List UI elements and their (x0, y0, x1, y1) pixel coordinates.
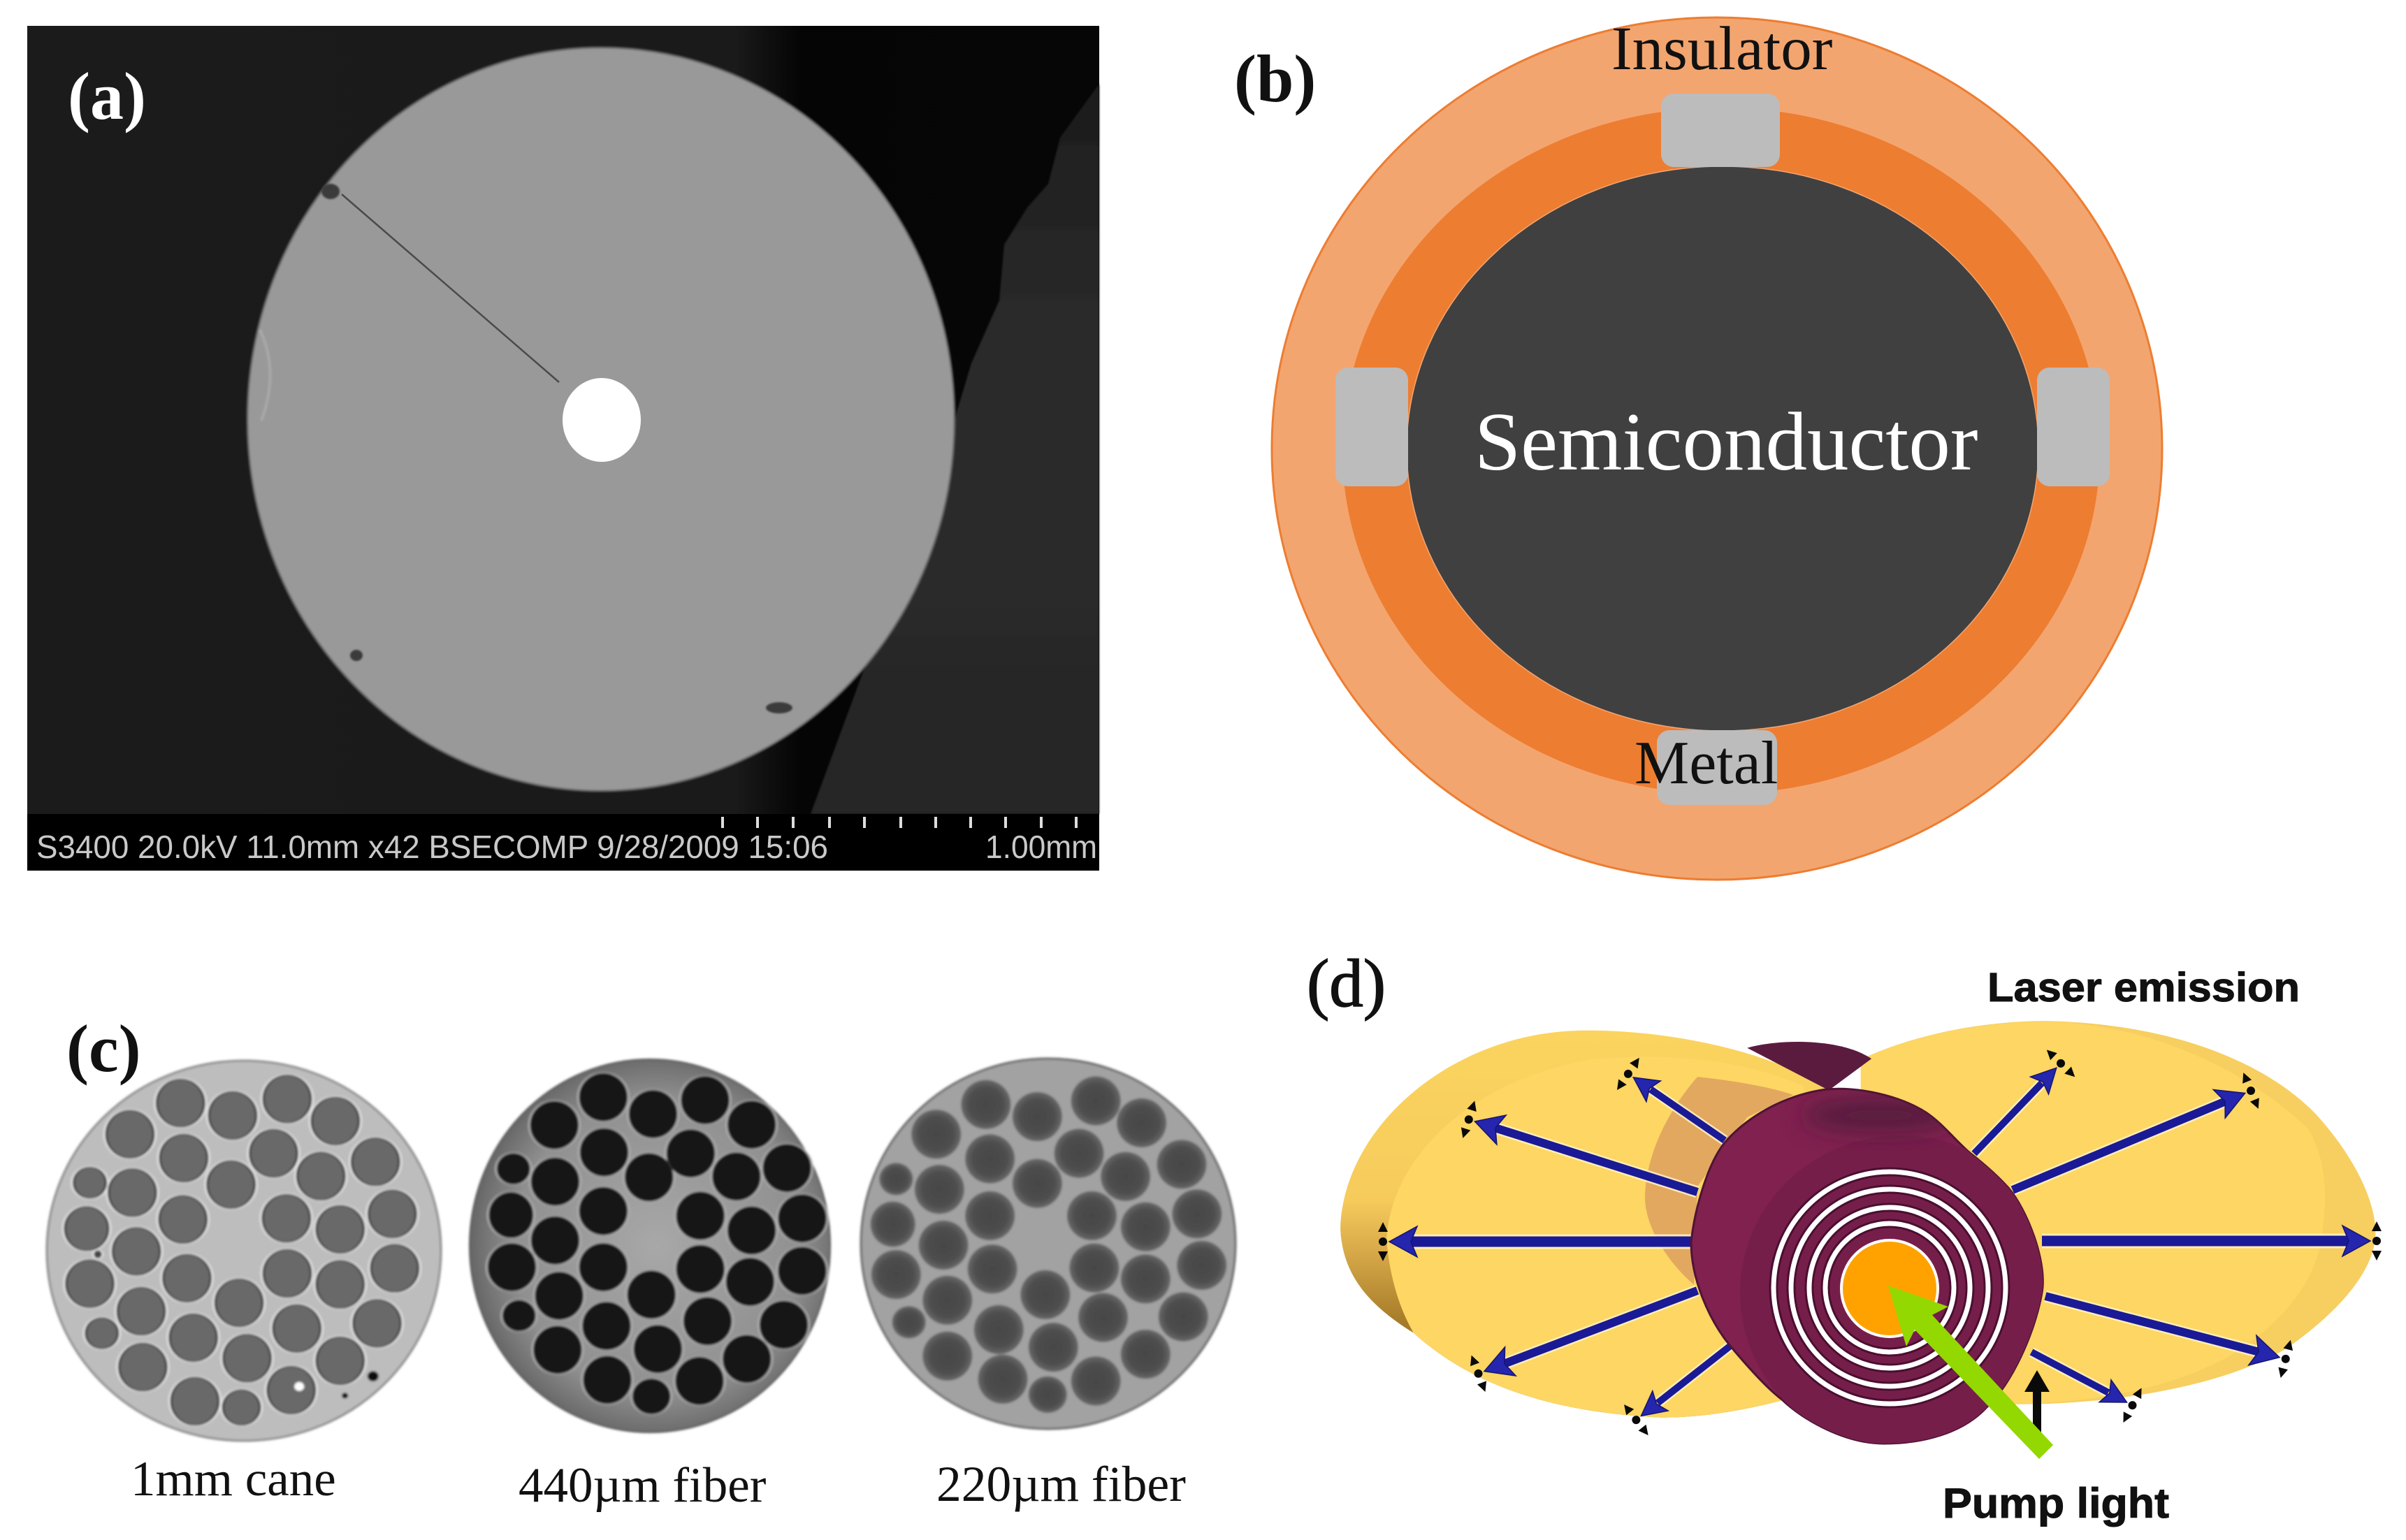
left emission lobe (1340, 1031, 1825, 1418)
fiber end face (1740, 1098, 2061, 1450)
panel label a: (a) (68, 59, 146, 133)
scale ticks (723, 817, 1076, 828)
fiber disc (247, 48, 955, 791)
panel a: SEM micrograph (27, 26, 1099, 871)
scale bar strip (27, 814, 1099, 871)
black pointer arrow (2024, 1370, 2050, 1439)
panel b: device cross section (1234, 15, 2162, 880)
laser emission label: Laser emission (1987, 965, 2300, 1010)
right emission lobe (1861, 1021, 2375, 1404)
metal contacts (1335, 94, 2110, 805)
blue emission arrows (1410, 1083, 2349, 1403)
green pump arrow (1888, 1286, 2053, 1459)
panel label b: (b) (1234, 41, 1316, 116)
top shade (1803, 1098, 1957, 1132)
gain core (1841, 1240, 1938, 1337)
translucent shadow (1645, 1077, 1793, 1285)
caption 220 micron fiber: 220µm fiber (936, 1457, 1186, 1512)
pump light label: Pump light (1943, 1480, 2169, 1527)
instrument caption: S3400 20.0kV 11.0mm x42 BSECOMP 9/28/2009 15:06 (36, 829, 828, 865)
radial crack (342, 194, 559, 382)
220 micron fiber micrograph (861, 1059, 1235, 1429)
arrow halos (1410, 1083, 2349, 1403)
sample holder wedge (811, 84, 1099, 814)
panel label d: (d) (1307, 946, 1386, 1021)
caption 440 micron fiber: 440µm fiber (519, 1458, 767, 1513)
fiber outline (1691, 1089, 2043, 1444)
concentric rings (1774, 1172, 2006, 1404)
edge specks (260, 184, 792, 713)
arrow shafts (1410, 1083, 2349, 1403)
scale value: 1.00mm (985, 829, 1097, 865)
orange ring (1342, 108, 2100, 794)
central hole (563, 378, 641, 462)
insulator ring (1272, 17, 2162, 880)
emission lobes (1340, 1021, 2375, 1418)
panel label c: (c) (66, 1011, 141, 1086)
micrograph background (27, 26, 1099, 871)
panel d: laser schematic (1307, 946, 2375, 1527)
caption 1mm cane: 1mm cane (131, 1452, 336, 1506)
insulator label: Insulator (1611, 15, 1832, 83)
fiber cylinder (1691, 1089, 2061, 1450)
panel c: fiber series (47, 1011, 1235, 1513)
semiconductor core (1407, 166, 2038, 731)
440 micron fiber micrograph (470, 1059, 830, 1432)
metal label: Metal (1635, 729, 1778, 797)
rear of fiber (1747, 1042, 1871, 1090)
semiconductor label: Semiconductor (1474, 395, 1978, 488)
cane micrograph (47, 1061, 441, 1441)
